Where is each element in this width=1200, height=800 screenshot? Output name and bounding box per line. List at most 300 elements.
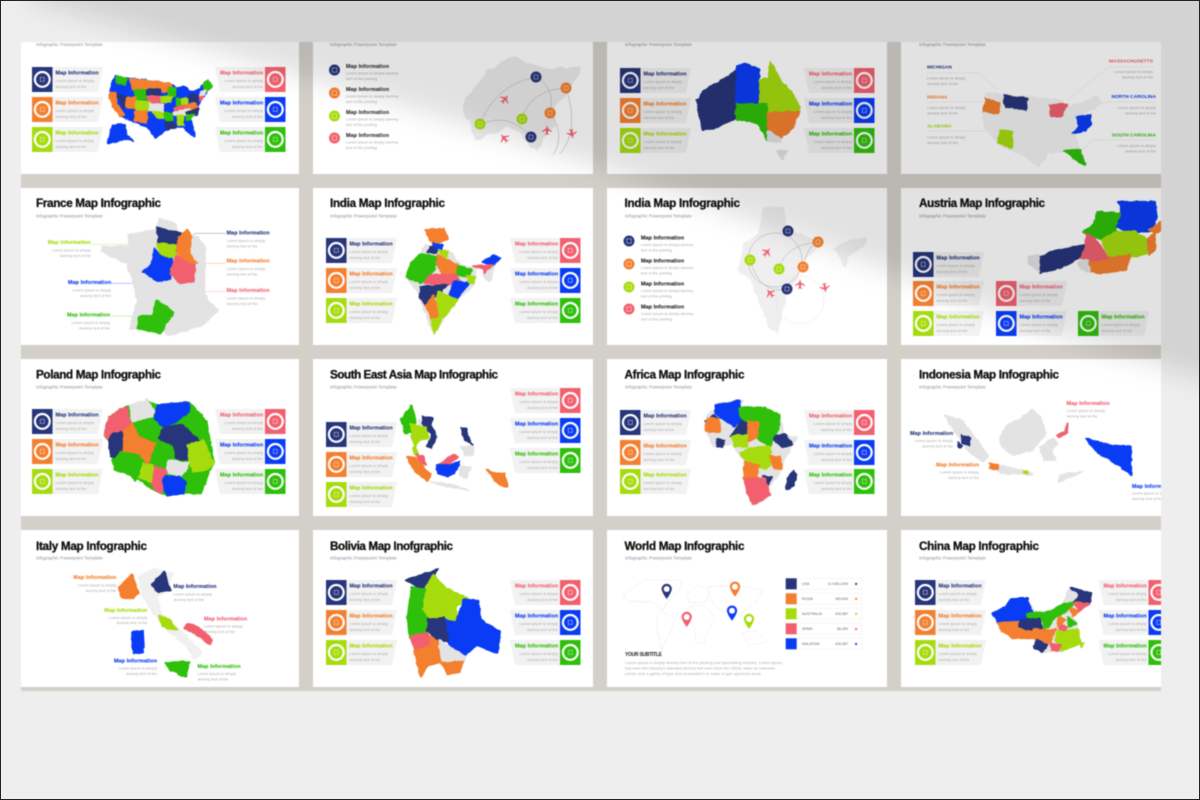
card: green: Lorem ipsum is simply [1102, 322, 1140, 327]
list item: red: Map Information [641, 304, 684, 310]
card: red: Map Information [1020, 285, 1062, 291]
card: green: dummy text of the [527, 315, 558, 320]
map: India with routes [738, 207, 868, 333]
callout: green: Map Information [67, 312, 110, 318]
list item: lime: text of the printing [346, 122, 377, 127]
card: navy: Map Information [936, 256, 980, 262]
list item: orange: Lorem ipsum is simply dummy [346, 94, 398, 98]
map: Asia with routes [465, 57, 580, 155]
card: blue: dummy text of the [821, 457, 852, 462]
card: orange [326, 452, 397, 477]
card: green [215, 469, 286, 494]
card: green: Map Information [515, 452, 558, 458]
card: lime: Map Information [350, 302, 392, 308]
list item: lime [624, 282, 693, 298]
callout: lime: Lorem ipsum is simply [109, 615, 147, 620]
card: blue [510, 418, 580, 443]
callout: blue: Lorem ipsum is simply [73, 288, 111, 292]
card: red: Lorem ipsum is simply [225, 420, 263, 425]
card: red: dummy text of the [821, 427, 852, 432]
card: green: Lorem ipsum is simply [1108, 651, 1147, 656]
card: orange: Map Information [56, 101, 98, 107]
card: lime [32, 127, 103, 152]
callout: green: Lorem ipsum is simply [198, 671, 236, 676]
map: Poland regions [104, 400, 214, 496]
callout: blue: dummy text of the [80, 293, 111, 298]
card: navy: Map Information [350, 584, 392, 590]
card: green: dummy text of the [1102, 328, 1132, 333]
card: blue: Lorem ipsum is simply [225, 450, 263, 455]
card: orange: Lorem ipsum is simply [56, 108, 94, 113]
card: orange: dummy text of the [350, 469, 380, 474]
card: orange: Map Information [936, 285, 980, 291]
card: navy: Map Information [350, 426, 392, 432]
list item: lime: text of the printing [641, 294, 672, 298]
card: blue: dummy text of the [1020, 328, 1050, 333]
card: red: Map Information [515, 242, 558, 248]
callout: navy [173, 584, 216, 602]
card: navy: Map Information [938, 584, 982, 590]
card: orange: Map Information [350, 614, 392, 620]
card: green: Lorem ipsum is simply [814, 480, 852, 485]
callout: green: dummy text of the [198, 676, 228, 681]
card: navy [32, 409, 103, 434]
card: red: dummy text of the [821, 85, 852, 90]
card: red [996, 281, 1067, 306]
card: green [1098, 640, 1169, 665]
card: green [804, 128, 874, 153]
callout: orange: Lorem ipsum is simply [78, 582, 116, 588]
card: blue [510, 268, 580, 293]
list item: lime: Lorem ipsum is simply dummy [641, 288, 693, 293]
list item: orange [624, 258, 693, 276]
card: orange: Map Information [350, 456, 392, 462]
callout: red: Lorem ipsum is simply [204, 624, 243, 628]
callout: navy: Lorem ipsum is simply [227, 238, 265, 243]
card: red: Map Information [1104, 584, 1146, 590]
card: red: Map Information [809, 72, 852, 78]
table row: Spain [786, 623, 862, 634]
card: green [1078, 311, 1149, 336]
card: blue: Lorem ipsum is simply [520, 429, 558, 434]
callout: Alabama: Lorem ipsum is simply [927, 134, 966, 140]
callout: South Carolina [1112, 132, 1156, 154]
callout: orange: Map Information [73, 575, 116, 581]
card: red: Map Information [515, 584, 558, 590]
card: lime: dummy text of the [938, 657, 969, 662]
card: green [804, 469, 874, 494]
callout: Michigan: dummy text of the [927, 81, 958, 86]
card: green: Lorem ipsum is simply [225, 480, 263, 485]
card: red: dummy text of the [232, 84, 263, 89]
list item: lime: Map Information [346, 110, 389, 116]
title: India Map Infographic [330, 197, 445, 210]
slide: Indonesia map (row 3, column 4) [901, 359, 1175, 516]
card: green: dummy text of the [821, 486, 852, 491]
subtitle: Infographic Powerpoint Template [919, 214, 986, 218]
list item: orange: text of the printing [346, 99, 377, 104]
table row: Australia: 434,987 [835, 612, 848, 616]
card: blue: dummy text of the [527, 435, 558, 440]
list item: orange: text of the printing [641, 270, 672, 276]
list item: navy: text of the printing [641, 248, 672, 252]
table row: Malaysia: 434,987 [835, 642, 848, 646]
callout: red: Map Information [204, 616, 247, 622]
list item: red [329, 132, 398, 150]
card: orange: Lorem ipsum is simply [56, 450, 94, 455]
card: orange [32, 97, 103, 122]
card: orange: dummy text of the [644, 457, 674, 462]
list item: lime: Map Information [641, 282, 684, 288]
card: orange: Lorem ipsum is simply [644, 451, 682, 456]
list item: orange: Lorem ipsum is simply dummy [641, 265, 693, 270]
card: navy: Map Information [644, 414, 686, 420]
card: navy [620, 68, 691, 93]
callout: blue: Map Information [114, 658, 157, 664]
card: blue: dummy text of the [232, 114, 263, 119]
map: France regions [101, 218, 218, 335]
card: navy [32, 67, 103, 92]
subtitle: Infographic Powerpoint Template [625, 42, 692, 47]
list item: navy: Lorem ipsum is simply dummy [641, 242, 693, 247]
card: blue: Lorem ipsum is simply [1108, 621, 1147, 626]
callout: blue: Map Information [68, 280, 111, 286]
card: orange [620, 440, 691, 465]
card: red: dummy text of the [527, 597, 558, 602]
list item: navy [329, 64, 398, 81]
card: blue [215, 439, 286, 464]
card: red: Map Information [220, 413, 263, 419]
title: Africa Map Infographic [624, 368, 745, 382]
table row: USA [786, 578, 862, 589]
map: India states [406, 229, 501, 333]
callout: Indiana: Lorem ipsum is simply [927, 105, 966, 110]
card: red: Lorem ipsum is simply [520, 399, 558, 404]
card: blue: Map Information [515, 614, 558, 620]
table row: Malaysia [786, 638, 862, 649]
table row: Australia [786, 608, 862, 619]
table row: Rusia [786, 593, 862, 604]
callout: blue [68, 280, 111, 298]
card: orange: dummy text of the [936, 298, 967, 303]
card: blue: Lorem ipsum is simply [1020, 322, 1058, 327]
card: navy [915, 580, 986, 605]
card: blue: Lorem ipsum is simply [520, 279, 558, 284]
card: red: Lorem ipsum is simply [814, 421, 852, 426]
table row: Spain: ■ [855, 626, 858, 631]
card: lime [913, 311, 984, 336]
card: red: Map Information [515, 392, 558, 398]
subtitle: Infographic Powerpoint Template [330, 214, 397, 218]
card: navy: Lorem ipsum is simply [936, 263, 975, 268]
callout: lime: Map Information [48, 240, 91, 246]
card: navy: Lorem ipsum is simply [644, 79, 682, 84]
callout: navy: Map Information [173, 584, 216, 590]
card: navy: Map Information [56, 413, 98, 419]
card: navy [326, 238, 397, 263]
card: lime: dummy text of the [56, 486, 86, 491]
map: Indonesia islands [944, 410, 1131, 482]
card: red [510, 580, 580, 605]
card: red [510, 388, 580, 413]
card: lime: Lorem ipsum is simply [56, 480, 94, 485]
card: blue: Map Information [809, 102, 852, 108]
card: green: Lorem ipsum is simply [225, 138, 263, 143]
card: orange [326, 610, 397, 635]
slide: India map (row 2, column 2) [313, 188, 593, 345]
callout: red [1066, 401, 1110, 418]
callout: blue [114, 658, 157, 676]
card: lime: Lorem ipsum is simply [644, 139, 682, 144]
slide: South East Asia map (row 3, column 2) [313, 359, 593, 516]
card: green: Map Information [809, 473, 852, 479]
card: green: Lorem ipsum is simply [814, 139, 852, 144]
card: navy: dummy text of the [56, 426, 86, 431]
card: navy [326, 580, 397, 605]
card: red: Lorem ipsum is simply [1020, 292, 1058, 297]
title: China Map Infographic [919, 540, 1039, 553]
callout: lime [48, 240, 91, 258]
subtitle: Infographic Powerpoint Template [330, 42, 397, 47]
subtitle: Infographic Powerpoint Template [330, 384, 397, 390]
callout: Massachusetts: Lorem ipsum is simply [1115, 69, 1153, 74]
list item: navy: text of the printing [346, 76, 377, 81]
map pin: orange [730, 582, 740, 597]
card: green [510, 448, 580, 473]
card: green: Map Information [1104, 644, 1146, 650]
callout: North Carolina: NORTH CAROLINA [1111, 94, 1156, 100]
callout: lime: dummy text of the [116, 620, 147, 625]
callout: Massachusetts [1109, 58, 1154, 80]
card: red: dummy text of the [527, 405, 558, 410]
subtitle: Infographic Powerpoint Template [330, 556, 397, 560]
callout: blue: Lorem ipsum is simply [119, 666, 157, 670]
card: blue [804, 440, 874, 465]
card: green: Lorem ipsum is simply [520, 651, 558, 656]
title: World Map Infographic [624, 540, 745, 553]
card: blue: Lorem ipsum is simply [814, 109, 852, 114]
list item: red: Lorem ipsum is simply dummy [641, 311, 693, 316]
body paragraph: Lorem ipsum is simply dummy text of the printing and typesetting industry. Lorem ipsum [625, 660, 782, 665]
callout: blue: dummy text of the [1132, 496, 1163, 501]
card: lime: dummy text of the [56, 144, 86, 149]
card: red [804, 410, 874, 435]
card: navy: Lorem ipsum is simply [56, 420, 94, 425]
subtitle: Infographic Powerpoint Template [919, 556, 986, 560]
table row: Rusia: 345,654 [835, 597, 848, 601]
callout: blue: Lorem ipsum is simply [1132, 490, 1171, 496]
list item: orange: Map Information [641, 258, 684, 264]
card: navy: Lorem ipsum is simply [56, 78, 94, 83]
card: orange: dummy text of the [350, 285, 380, 290]
callout: green [198, 664, 240, 681]
callout: blue: dummy text of the [126, 671, 157, 676]
callout: South Carolina: dummy text of the [1125, 148, 1156, 154]
card: navy: dummy text of the [350, 255, 380, 260]
card: lime [326, 640, 397, 665]
list item: navy: Lorem ipsum is simply dummy [346, 70, 398, 76]
slide: Africa map (row 3, column 3) [607, 359, 887, 516]
callout: navy [910, 431, 953, 448]
card: orange: dummy text of the [350, 627, 380, 632]
card: lime [915, 640, 986, 665]
card: red: Lorem ipsum is simply [520, 249, 558, 254]
callout: North Carolina: dummy text of the [1125, 110, 1156, 116]
card: green [510, 298, 580, 323]
list item: orange [329, 87, 398, 104]
card: blue: Map Information [1104, 614, 1146, 620]
callout: orange: dummy text of the [227, 271, 258, 276]
callout: blue: Map Information [1132, 484, 1175, 490]
body paragraph [625, 660, 782, 676]
card: navy: dummy text of the [350, 439, 380, 444]
card: orange: Map Information [644, 444, 686, 450]
callout: Massachusetts: dummy text of the [1122, 74, 1153, 80]
card: green: Map Information [515, 644, 558, 650]
card: blue [510, 610, 580, 635]
card: lime: Map Information [56, 473, 98, 479]
card: red: dummy text of the [527, 255, 558, 260]
card: blue: dummy text of the [1116, 627, 1146, 632]
card: red: Map Information [809, 414, 852, 420]
card: green: Map Information [809, 132, 852, 138]
card: green: dummy text of the [1116, 657, 1146, 662]
card: blue [804, 98, 874, 123]
card: navy: dummy text of the [644, 85, 674, 90]
card: orange: Lorem ipsum is simply [936, 292, 975, 297]
card: lime: Lorem ipsum is simply [350, 309, 388, 314]
callout: Indiana: INDIANA [927, 94, 948, 100]
card: blue: Map Information [220, 101, 263, 107]
table row: Malaysia: ■ [855, 641, 858, 646]
slide: USA states callouts (row 1, column 4) [901, 40, 1161, 174]
card: red: Map Information [220, 71, 263, 77]
callout: South Carolina: SOUTH CAROLINA [1112, 132, 1156, 138]
slide: Poland map (row 3, column 1) [21, 359, 299, 516]
callout: red: dummy text of the [227, 301, 258, 306]
subtitle: Infographic Powerpoint Template [36, 214, 103, 218]
callout: navy: dummy text of the [227, 243, 258, 248]
table row: Australia: AUSTRALIA [802, 612, 823, 616]
subtitle: Infographic Powerpoint Template [36, 384, 103, 390]
table row: USA: ■ [855, 581, 858, 586]
card: red: Lorem ipsum is simply [225, 78, 263, 83]
list item: orange: Map Information [346, 87, 389, 93]
subtitle: Infographic Powerpoint Template [919, 384, 986, 390]
card: blue: Map Information [515, 422, 558, 428]
callout: orange [936, 462, 979, 480]
card: blue: Map Information [1020, 315, 1062, 321]
card: navy: Lorem ipsum is simply [350, 433, 388, 438]
card: navy: Map Information [350, 242, 392, 248]
card: lime [32, 469, 103, 494]
slide: USA map (row 1, column 1) [21, 40, 299, 174]
card: orange: Map Information [644, 102, 686, 108]
callout: Alabama: ALABAMA [927, 124, 952, 130]
callout: lime [104, 608, 147, 625]
card: red: Lorem ipsum is simply [1108, 591, 1147, 596]
list item: lime [329, 110, 398, 127]
card: navy: dummy text of the [938, 597, 969, 602]
callout: lime: Lorem ipsum is simply [52, 248, 91, 252]
map pin: navy [662, 584, 672, 599]
map: Africa countries [705, 400, 797, 505]
callout: Michigan [927, 65, 966, 86]
slide: Australia map (row 1, column 3) [607, 40, 887, 174]
callout: Indiana: dummy text of the [927, 110, 958, 116]
table row: Spain: 86,300 [837, 627, 848, 631]
card: lime: Lorem ipsum is simply [644, 480, 682, 485]
list item: red: Lorem ipsum is simply dummy [346, 140, 398, 144]
slide: Austria map (row 2, column 4) [901, 188, 1163, 345]
map: South East Asia countries [401, 405, 507, 490]
callout: Michigan: Lorem ipsum is simply [927, 76, 966, 80]
card: navy: Map Information [644, 72, 686, 78]
callout: blue [1132, 484, 1175, 501]
card: lime: Map Information [644, 132, 686, 138]
card: lime: Map Information [350, 644, 392, 650]
card: green: Map Information [220, 131, 263, 137]
card: blue: Lorem ipsum is simply [225, 108, 263, 113]
title: Poland Map Infographic [36, 368, 161, 382]
card: red: dummy text of the [232, 426, 263, 431]
card: lime: dummy text of the [350, 315, 380, 320]
card: red [215, 409, 286, 434]
card: orange [913, 281, 984, 306]
card: red: dummy text of the [1020, 298, 1050, 303]
list item: red: text of the printing [346, 145, 377, 150]
list item: navy: Map Information [346, 64, 389, 70]
callout: navy: Map Information [910, 431, 953, 437]
slide: France map (row 2, column 1) [21, 188, 299, 345]
card: orange: Map Information [56, 443, 98, 449]
card: navy: dummy text of the [56, 84, 86, 89]
callout: red: Map Information [1066, 401, 1110, 407]
card: navy: dummy text of the [644, 427, 674, 432]
card: green: Map Information [515, 302, 558, 308]
table row: Rusia: RUSIA [802, 597, 814, 601]
card: navy: dummy text of the [350, 597, 380, 602]
callout: orange: dummy text of the [85, 588, 116, 593]
slide: World map (row 4, column 3) [607, 530, 887, 687]
callout: red: dummy text of the [1066, 414, 1097, 418]
map: Italy regions [119, 568, 212, 677]
callout: red [204, 616, 247, 634]
callout: South Carolina: Lorem ipsum is simply [1118, 143, 1156, 148]
backing band behind the slides [21, 42, 1161, 691]
callout: red: Map Information [227, 288, 270, 294]
slide: Bolivia map (row 4, column 2) [313, 530, 593, 687]
table row: Spain: SPAIN [802, 627, 813, 631]
callout: red [227, 288, 270, 306]
callout: orange [73, 575, 116, 593]
callout: red: Lorem ipsum is simply [1066, 408, 1105, 413]
card: green: Map Information [220, 473, 263, 479]
map: Austria regions [1029, 202, 1163, 273]
map: USA highlighted states [983, 93, 1101, 167]
title: Indonesia Map Infographic [919, 368, 1059, 382]
callout: lime: Map Information [104, 608, 147, 614]
subtitle: Infographic Powerpoint Template [625, 556, 692, 560]
table row: USA: USA [802, 582, 810, 586]
card: lime: dummy text of the [350, 499, 380, 504]
subtitle: Infographic Powerpoint Template [919, 42, 986, 47]
card: orange [620, 98, 691, 123]
table row: Malaysia: MALAYSIA [802, 642, 820, 646]
card: orange [32, 439, 103, 464]
title: India Map Infographic [624, 197, 740, 210]
map: world outline [623, 580, 767, 650]
